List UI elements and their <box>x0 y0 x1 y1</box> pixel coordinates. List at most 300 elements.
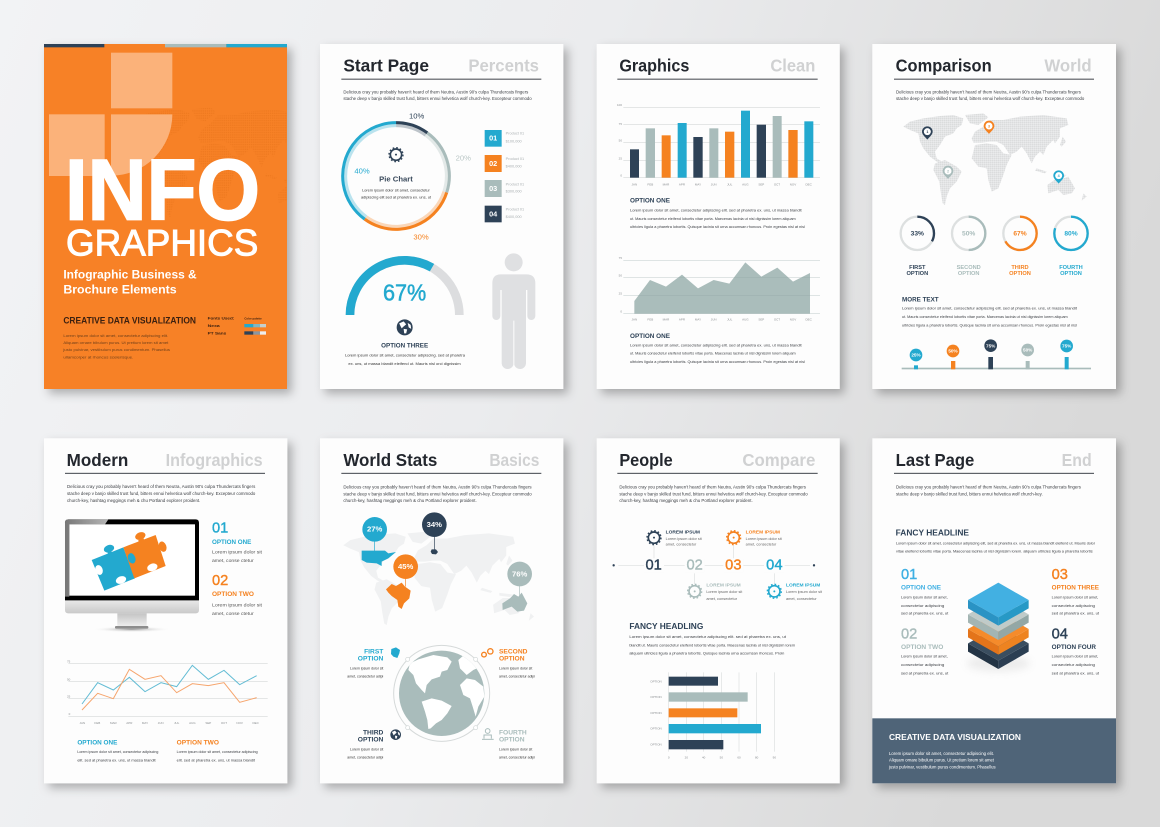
option 03: Lorem ipsum dolor sit amet, <box>1052 596 1098 600</box>
icon: person at desk <box>482 729 494 739</box>
icon: globe <box>397 319 413 335</box>
pie chart percent labels <box>354 111 471 242</box>
pie chart centre text <box>361 175 431 200</box>
fancy heading text: Lorem ipsum dolor sit amet, consectetur adipiscing elit. sed at pharetra ex. uns, ut <box>629 635 786 639</box>
panel: people page <box>597 438 840 783</box>
area chart: 75 <box>619 256 622 260</box>
option 02: consectetur adipiscing <box>901 663 944 667</box>
cover text block: Lorem ipsum dolor sit amet, consectetur adipiscing elit. <box>63 333 168 338</box>
bar chart: NOV <box>790 182 796 186</box>
legend option one: OPTION ONE <box>77 740 117 747</box>
product legend: $300,000 <box>506 190 522 194</box>
timeline captions: amet, consectetur <box>746 543 777 547</box>
bar chart: JUL <box>727 182 733 186</box>
fourth option: Lorem ipsum dolor sit <box>499 748 532 752</box>
bar chart: 0 <box>620 174 622 178</box>
panel: last page <box>872 438 1116 783</box>
bar chart: DEC <box>806 182 813 186</box>
dotted world map <box>903 113 1087 205</box>
option 03 <box>1052 567 1099 616</box>
intro text: church-key, hashtag meggings meh & chu Portland explorer proident. <box>67 498 200 503</box>
bar chart: 100 <box>617 103 622 107</box>
map callout: 34 percent France: 34% <box>427 520 442 529</box>
map callout: 45 percent Brazil <box>386 554 418 609</box>
horizontal bar chart: 50 <box>720 755 723 759</box>
more text block <box>902 296 1077 328</box>
option 02: OPTION TWO <box>901 645 944 651</box>
area chart: DEC <box>806 318 813 322</box>
icon: orange gears <box>482 649 493 657</box>
heading: Last Page <box>896 450 975 470</box>
cover text block: Aliquam ornare bibulum purus. Ut pretium lorem sit amet <box>63 340 169 345</box>
area chart: MAR <box>663 318 670 322</box>
option 01 text: Lorem ipsum dolor sit <box>212 549 263 554</box>
product legend: 04 <box>489 210 498 219</box>
pie chart percent labels: 30% <box>413 233 429 242</box>
panel: world stats page <box>320 438 563 783</box>
product legend <box>485 130 524 222</box>
heading <box>341 450 541 474</box>
option 01 <box>901 567 948 616</box>
bar chart: SEP <box>758 182 764 186</box>
pie chart percent labels: 20% <box>456 154 471 163</box>
timeline captions: LOREM IPSUM <box>706 582 741 587</box>
area chart: APR <box>679 318 686 322</box>
footer band: CREATIVE DATA VISUALIZATION <box>889 732 1021 742</box>
product legend: 02 <box>489 159 497 168</box>
pie chart centre text: adipiscing elit sed at pharetra ex. uns, ut <box>361 196 431 200</box>
page sheet <box>597 44 840 389</box>
donut option labels: OPTION <box>958 271 980 277</box>
intro text: stache deep v banjo skilled trust fund, bitters ennui helvetica wolf church-key. Excepteur commodo <box>343 96 532 101</box>
panel: modern page <box>44 438 287 783</box>
intro text: stache deep v banjo skilled trust fund, bitters ennui helvetica wolf church-key. Excepteur commodo <box>896 96 1085 101</box>
option 01 text: 01 <box>212 521 228 537</box>
donut option labels: FOURTH <box>1059 265 1083 271</box>
horizontal bar chart: 20 <box>685 755 688 759</box>
lollipop chart: 50% <box>948 349 959 354</box>
option 01 text: OPTION ONE <box>212 539 251 546</box>
heading <box>617 450 818 474</box>
intro text <box>343 89 532 101</box>
area chart: JUL <box>727 318 733 322</box>
fancy headline text <box>896 529 1096 554</box>
lollipop chart: 75% <box>1062 344 1072 349</box>
bar chart: AUG <box>742 182 749 186</box>
footer band: justo pulvinar, vestibulum purus condimentum. Phasellus <box>888 764 996 769</box>
fancy heading text: FANCY HEADLING <box>629 622 703 631</box>
numbered timeline: 04 <box>766 557 782 573</box>
option 02 text: amet, conse ctetur <box>212 611 254 616</box>
timeline captions: Lorem ipsum dolor sit <box>666 537 702 541</box>
product legend: Product 01 <box>506 208 524 212</box>
more text block: ultricies ligula a pharetra lobortis. Quisque lacinia sit urna accumsan rhoncus. Proin egestas nisl at nisl <box>902 324 1077 328</box>
third option: OPTION <box>358 736 384 743</box>
first option <box>347 649 384 678</box>
fancy heading text <box>629 622 795 655</box>
grey world map <box>343 532 534 625</box>
horizontal bar chart: OPTION <box>650 711 662 715</box>
intro text <box>896 89 1085 101</box>
option 03: consectetur adipiscing <box>1052 604 1095 608</box>
line chart: JAN <box>80 721 85 725</box>
lollipop chart <box>902 339 1091 369</box>
line chart: APR <box>126 721 133 725</box>
map callout: 27 percent USA: 27% <box>367 525 383 534</box>
horizontal bar chart: OPTION <box>650 695 662 699</box>
isometric layer stack <box>967 583 1030 671</box>
option 04: OPTION FOUR <box>1052 645 1097 651</box>
fancy headline text: Lorem ipsum dolor sit amet, consectetur adipiscing elit, sed at pharetra ex. uns, ut massa blandit eleifend ut. Mauris dolor <box>896 541 1096 545</box>
bar chart: FEB <box>647 182 653 186</box>
donut values: 33% <box>911 230 924 237</box>
map pins: 3 <box>988 124 990 128</box>
numbered timeline: 03 <box>725 557 741 573</box>
fancy headline text: FANCY HEADLINE <box>896 529 970 538</box>
option one text: OPTION ONE <box>630 198 670 205</box>
area chart: OCT <box>774 318 780 322</box>
map pins: 2 <box>947 169 949 173</box>
page sheet <box>872 438 1116 783</box>
product legend: Product 01 <box>506 132 524 136</box>
option 01: OPTION ONE <box>901 585 941 591</box>
timeline captions: LOREM IPSUM <box>746 529 780 534</box>
numbered timeline: 01 <box>646 557 662 573</box>
horizontal bar chart: OPTION <box>650 727 662 731</box>
area chart <box>619 256 820 322</box>
bar chart <box>617 103 820 186</box>
intro text: Delicious cray you probably haven't heard of them Neutra, Austin 90's culpa Thundercats fingers <box>896 485 1081 490</box>
heading: Basics <box>489 450 539 470</box>
heading <box>617 56 818 80</box>
more text block: Lorem ipsum dolor sit amet, consectetur adipiscing elit. sed at pharetra ex. uns, ut massa blandit <box>902 306 1077 310</box>
heading: People <box>619 450 673 470</box>
map callout: 76 percent Australia: 76% <box>512 569 528 578</box>
option 04: sed at pharetra ex. uns, ut <box>1052 671 1099 675</box>
option 04 <box>1052 626 1099 675</box>
fancy heading text: aliquam ultricies ligula a pharetra lobortis. Quisque lacinia urna accumsan rhoncus. Proin <box>629 651 784 655</box>
line chart: 50 <box>67 677 71 681</box>
footer band: Aliquam ornare bibulum purus. Ut pretium lorem sit amet <box>889 758 995 763</box>
product legend: $400,000 <box>506 164 522 168</box>
page sheet <box>44 438 287 783</box>
option 04: consectetur adipiscing <box>1052 663 1095 667</box>
cover fonts legend: Fonts Used: <box>208 315 234 320</box>
donut values: 50% <box>962 230 975 237</box>
third option: THIRD <box>363 730 384 737</box>
legend option one <box>77 740 158 762</box>
line chart: FEB <box>94 721 100 725</box>
icon: globe <box>390 729 401 740</box>
donut values: 67% <box>1013 230 1027 237</box>
area chart: JUN <box>711 318 717 322</box>
line chart: AUG <box>189 721 196 725</box>
intro text: Delicious cray you probably haven't heard of them Neutra, Austin 90's culpa Thundercats fingers <box>896 89 1081 94</box>
intro text <box>343 484 532 503</box>
donut option labels: SECOND <box>957 265 981 271</box>
map callout: 45 percent Brazil: 45% <box>398 562 414 571</box>
footer band: Lorem ipsum dolor sit amet, consectetur adipiscing elit. <box>889 751 994 756</box>
first option: amet, consectetur adipi <box>347 674 384 678</box>
area chart: 0 <box>620 310 622 314</box>
intro text: stache deep v banjo skilled trust fund, bitters ennui helvetica wolf church-key. <box>896 491 1043 496</box>
bar chart: 75 <box>619 122 622 126</box>
intro text <box>896 485 1081 496</box>
horizontal bar chart: 90 <box>773 755 776 759</box>
intro text: stache deep v banjo skilled trust fund, bitters ennui helvetica wolf church-key. Excepteur commodo <box>67 491 256 496</box>
option 02 text: OPTION TWO <box>212 591 254 598</box>
line chart: DEC <box>253 721 260 725</box>
option one text lower: Lorem ipsum dolor sit amet, consectetur adipiscing elit. sed at pharetra ex. uns, ut massa blandit <box>630 343 802 347</box>
horizontal bar chart: 40 <box>702 755 706 759</box>
cover title: INFO <box>65 142 260 238</box>
map callout: 27 percent USA <box>362 517 396 566</box>
icon: person <box>492 253 535 369</box>
option one text lower <box>630 333 805 364</box>
product legend: Product 01 <box>506 182 524 186</box>
second option: Lorem ipsum dolor sit <box>499 666 532 670</box>
heading: Start Page <box>343 56 429 76</box>
heading: End <box>1062 450 1092 470</box>
option 01: 01 <box>901 567 917 583</box>
option 02 <box>901 626 948 675</box>
heading: Infographics <box>166 450 263 470</box>
line chart: OCT <box>221 721 227 725</box>
more text block: ut. Mauris consectetur eleifend lobortis vitae porta. Maecenas lacinia ut nisl dignissim lorem aliquam <box>902 315 1068 319</box>
cover text block: CREATIVE DATA VISUALIZATION <box>63 316 196 326</box>
line chart: 25 <box>67 695 71 699</box>
timeline captions <box>666 529 822 601</box>
option 01 text: amet, conse ctetur <box>212 558 254 563</box>
intro text <box>67 484 256 503</box>
map pins: 4 <box>1058 174 1061 178</box>
page sheet <box>320 438 563 783</box>
cover fonts legend: PT Sans <box>208 330 227 335</box>
page sheet <box>872 44 1116 389</box>
monitor illustration <box>65 519 199 632</box>
cover fonts legend: Color palette <box>244 317 263 320</box>
option three text: Lorem ipsum dolor sit amet, consectetur adipiscing. sed at pharetra <box>345 354 465 358</box>
bar chart: MAR <box>663 182 670 186</box>
donut option labels: THIRD <box>1011 265 1029 271</box>
more text block: MORE TEXT <box>902 296 939 303</box>
area chart: 25 <box>619 292 622 296</box>
product legend: Product 01 <box>506 157 524 161</box>
horizontal bar chart: 0 <box>668 755 670 759</box>
heading: Graphics <box>619 56 689 76</box>
heading <box>894 450 1094 474</box>
intro text: church-key, hashtag meggings meh & chu Portland explorer proident. <box>619 498 753 503</box>
area chart: AUG <box>742 318 749 322</box>
fancy heading text: blandit ut. Mauris consectetur eleifend lobortis vitae porta. Maecenas lacinia ut nisl dignissim lorem <box>629 643 795 647</box>
donut option labels: OPTION <box>1009 271 1031 277</box>
legend option two: elit. sed at pharetra ex. uns, ut massa blandit <box>177 758 255 762</box>
page sheet <box>320 44 563 389</box>
option one text: ultricies ligula a pharetra lobortis. Quisque lacinia sit urna accumsan rhoncus. Proin egestas nisl at nisl <box>630 225 805 229</box>
horizontal bar chart: OPTION <box>650 679 662 683</box>
cover text block <box>62 316 196 359</box>
line chart: 75 <box>67 659 71 663</box>
intro text: stache deep v banjo skilled trust fund, bitters ennui helvetica wolf church-key. Excepteur commodo <box>619 491 808 496</box>
bar chart: 25 <box>619 156 622 160</box>
cover text block: justo pulvinar, vestibulum purus condimentum. Phasellus <box>62 347 170 352</box>
timeline captions: amet, consectetur <box>666 543 697 547</box>
first option: FIRST <box>364 649 383 656</box>
third option <box>347 730 384 760</box>
heading: Modern <box>67 450 128 470</box>
area chart: SEP <box>758 318 764 322</box>
heading: Comparison <box>896 56 992 76</box>
intro text: church-key, hashtag meggings meh & chu Portland explorer proident. <box>343 498 477 503</box>
option three text <box>345 343 465 366</box>
horizontal bar chart: OPTION <box>650 743 662 747</box>
donut option labels <box>906 265 1083 277</box>
heading: Percents <box>468 56 539 76</box>
donut option labels: OPTION <box>906 271 928 277</box>
horizontal bar chart: 80 <box>755 755 759 759</box>
donut option labels: OPTION <box>1060 271 1082 277</box>
option 03: sed at pharetra ex. uns, ut <box>1052 612 1099 616</box>
cover subtitle: Brochure Elements <box>63 283 177 296</box>
cover decorative squares <box>49 53 172 176</box>
option one text lower: ultricies ligula a pharetra lobortis. Quisque lacinia sit urna accumsan rhoncus. Proin egestas nisl at nisl <box>630 360 805 364</box>
timeline captions: LOREM IPSUM <box>786 582 820 587</box>
fourth option: amet, consectetur adipi <box>499 756 535 760</box>
cover text block: ullamcorper at rhoncus scelerisque. <box>63 354 133 359</box>
gauge value: 67% <box>383 280 426 306</box>
legend option two: OPTION TWO <box>177 740 219 747</box>
intro text <box>619 484 808 503</box>
heading <box>65 450 265 474</box>
second option <box>499 649 535 678</box>
line chart: NOV <box>236 721 243 725</box>
line chart: MAY <box>142 721 148 725</box>
cover dotted world map <box>127 107 319 217</box>
first option: Lorem ipsum dolor sit <box>350 666 383 670</box>
fourth option: FOURTH <box>499 730 527 737</box>
bar chart: JUN <box>711 182 717 186</box>
globe illustration <box>394 645 490 741</box>
gauge chart <box>350 260 459 315</box>
donut charts <box>901 217 1088 250</box>
area chart: MAY <box>695 318 701 322</box>
legend option one: Lorem ipsum dolor sit amet, consectetur adipiscing <box>77 750 158 754</box>
fourth option: OPTION <box>499 736 525 743</box>
heading: World <box>1044 56 1092 76</box>
cover fonts legend: Nexa <box>208 323 221 328</box>
panel: comparison page <box>872 44 1116 389</box>
intro text: Delicious cray you probably haven't heard of them Neutra, Austin 90's culpa Thundercats fingers <box>619 484 806 489</box>
line chart: JUN <box>158 721 164 725</box>
pie chart centre text: Pie Chart <box>379 175 413 184</box>
option 02 text: 02 <box>212 573 228 589</box>
donut values <box>911 230 1078 237</box>
line chart: JUL <box>174 721 180 725</box>
line chart <box>67 659 268 725</box>
panel: graphics page <box>597 44 840 389</box>
line chart: MAR <box>110 721 117 725</box>
legend option two: Lorem ipsum dolor sit amet, consectetur adipiscing <box>177 750 258 754</box>
cover subtitle: Infographic Business & <box>63 268 197 281</box>
timeline captions: amet, consectetur <box>786 597 818 601</box>
area chart: FEB <box>647 318 653 322</box>
option 02: sed at pharetra ex. uns, ut <box>901 671 948 675</box>
product legend: $100,000 <box>506 139 522 143</box>
third option: Lorem ipsum dolor sit <box>350 748 383 752</box>
lollipop chart: 25% <box>911 353 922 358</box>
second option: OPTION <box>499 655 525 662</box>
panel: start page <box>320 44 563 389</box>
timeline captions: Lorem ipsum dolor sit <box>786 590 822 594</box>
legend option two <box>177 740 258 762</box>
map callout: 34 percent France <box>422 512 447 554</box>
first option: OPTION <box>358 655 384 662</box>
cover subtitle <box>63 268 197 296</box>
pie chart centre text: Lorem ipsum dolor sit amet, consectetur <box>362 188 431 192</box>
lollipop chart: 50% <box>1023 348 1033 353</box>
pie chart percent labels: 40% <box>354 166 370 175</box>
heading: Compare <box>742 450 816 470</box>
icon: gear <box>389 148 403 162</box>
option 01: consectetur adipiscing <box>901 604 944 608</box>
bar chart: MAY <box>695 182 701 186</box>
cover top colour strip <box>44 44 287 47</box>
line chart: 0 <box>69 712 71 716</box>
product legend: $400,000 <box>506 215 522 219</box>
horizontal bar chart: 60 <box>737 755 741 759</box>
intro text: Delicious cray you probably haven't heard of them Neutra, Austin 90's culpa Thundercats fingers <box>343 89 528 94</box>
heading: World Stats <box>343 450 437 470</box>
footer band <box>872 718 1116 783</box>
option 03: 03 <box>1052 567 1068 583</box>
legend option one: elit. sed at pharetra ex. uns, ut massa blandit <box>77 758 156 762</box>
intro text: Delicious cray you probably haven't heard of them Neutra, Austin 90's culpa Thundercats fingers <box>343 484 532 489</box>
product legend: 01 <box>489 134 497 143</box>
option 02: 02 <box>901 626 917 642</box>
heading <box>341 56 541 80</box>
option 01 text <box>212 521 263 563</box>
third option: amet, consectetur adipi <box>347 756 384 760</box>
option one text lower: OPTION ONE <box>630 333 670 340</box>
map pins <box>922 121 1064 184</box>
icon: puzzle pieces <box>92 531 168 591</box>
intro text: Delicious cray you probably haven't heard of them Neutra, Austin 90's culpa Thundercats fingers <box>67 484 255 489</box>
line chart: SEP <box>205 721 211 725</box>
map pins: 1 <box>926 130 928 134</box>
icon: puzzle piece <box>391 647 400 658</box>
bar chart: JAN <box>632 182 637 186</box>
option 01: Lorem ipsum dolor sit amet, <box>901 596 948 600</box>
fancy headline text: vitae eleifend lobortis vitae porta. Maecenas lacinia ut nisl dignissim lorem. aliquam ultricies ligula a pharetra lobortis <box>896 550 1093 554</box>
lollipop chart: 75% <box>986 343 996 348</box>
second option: amet, consectetur adipi <box>499 674 535 678</box>
option one text: Lorem ipsum dolor sit amet, consectetur adipiscing elit. sed at pharetra ex. uns, ut massa blandit <box>630 209 802 213</box>
bar chart: OCT <box>774 182 780 186</box>
timeline captions: LOREM IPSUM <box>666 529 700 534</box>
option one text: ut. Mauris consectetur eleifend lobortis vitae porta. Maecenas lacinia ut nisl dignissim lorem aliquam <box>630 217 796 221</box>
area chart: NOV <box>790 318 796 322</box>
donut values: 80% <box>1064 230 1078 237</box>
option 02 text: Lorem ipsum dolor sit <box>212 602 263 607</box>
heading <box>894 56 1094 80</box>
pie chart percent labels: 10% <box>409 111 425 120</box>
gear icons <box>647 531 781 598</box>
option 01: sed at pharetra ex. uns, ut <box>901 612 948 616</box>
numbered timeline: 02 <box>687 557 703 573</box>
map callout: 76 percent Australia <box>502 562 532 612</box>
option 02 text <box>212 573 263 616</box>
option three text: OPTION THREE <box>381 343 428 350</box>
